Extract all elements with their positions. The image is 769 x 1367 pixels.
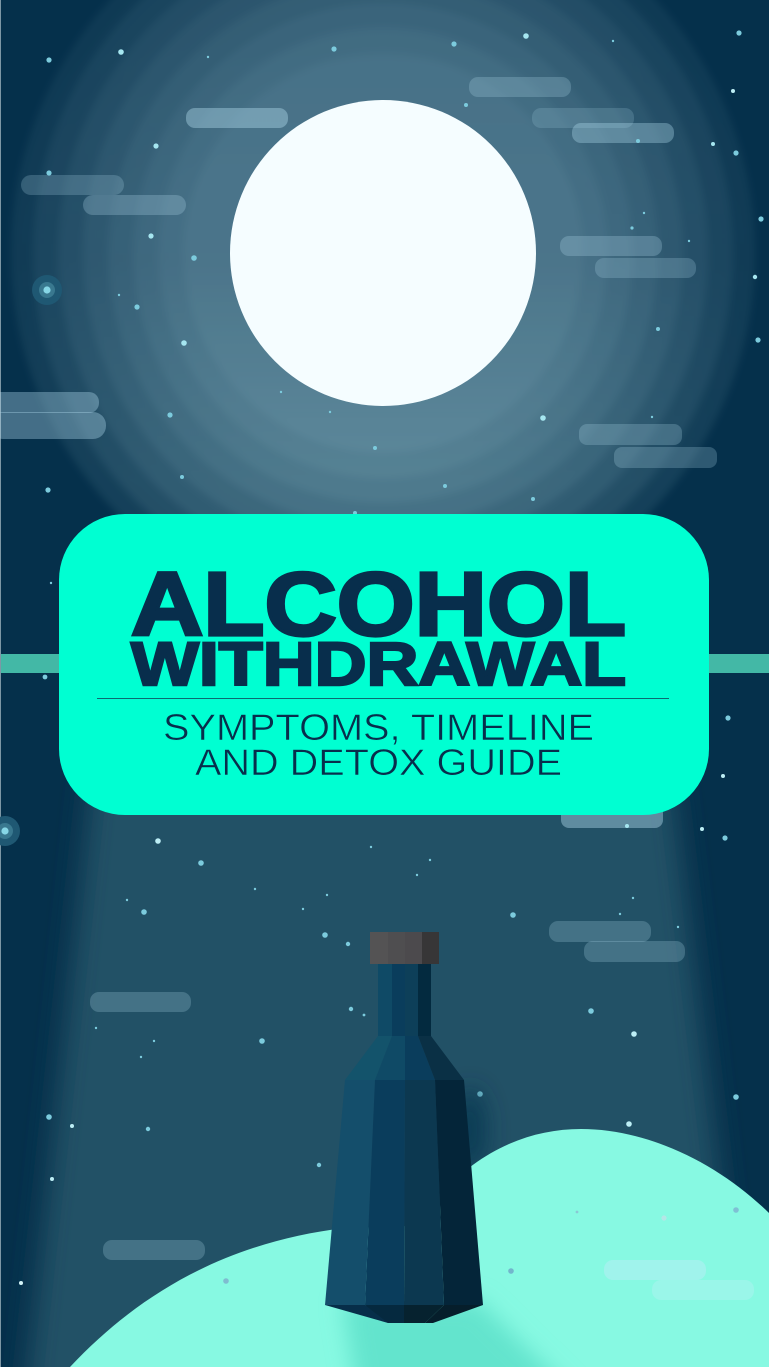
bottle shadow on hill	[342, 1300, 580, 1367]
bottle base	[325, 1305, 483, 1323]
subtitle line one: SYMPTOMS, TIMELINE	[163, 706, 594, 748]
teal horizontal band	[0, 654, 769, 673]
title: withdrawal: WITHDRAWAL	[131, 630, 626, 698]
subtitle line two: AND DETOX GUIDE	[195, 741, 562, 783]
lower light beam	[25, 780, 745, 1367]
moon glow rings	[11, 0, 755, 625]
bottle shoulder	[345, 1036, 464, 1080]
distant star left lower	[0, 816, 20, 846]
distant star left upper	[32, 275, 62, 305]
bottle body	[325, 1080, 483, 1305]
left edge line	[0, 0, 1, 1367]
title: alcohol: ALCOHOL	[131, 555, 626, 655]
bottle shadow on sky	[454, 1088, 486, 1172]
divider	[97, 698, 669, 699]
bottle	[325, 932, 483, 1323]
hill clouds and stars	[223, 1207, 754, 1300]
hills	[70, 1129, 769, 1367]
bottle cap	[370, 932, 439, 964]
moon	[230, 100, 536, 406]
title panel	[59, 514, 709, 815]
bottle neck	[378, 964, 431, 1036]
